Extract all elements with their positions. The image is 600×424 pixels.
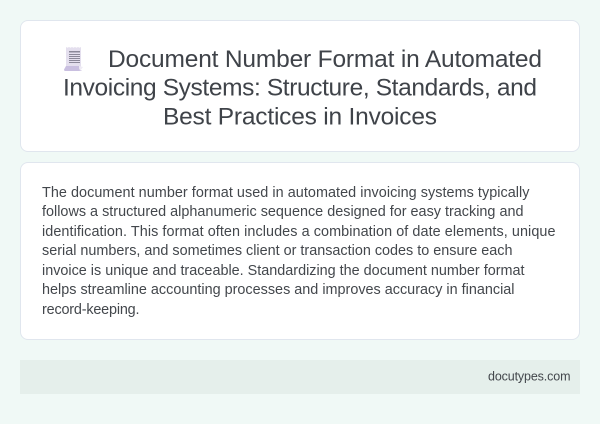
text block: description: serial numbers, and sometimes client or transaction codes to ensure each: [42, 243, 512, 259]
title: Invoicing Systems: Structure, Standards, and: [63, 74, 537, 102]
text block: description: [42, 185, 556, 318]
text block: description: invoice is unique and traceable. Standardizing the document number format: [42, 263, 524, 279]
text block: description: identification. This format often includes a combination of date elements, unique: [42, 224, 556, 240]
footer bar: [20, 360, 580, 394]
text block: description: record-keeping.: [42, 302, 140, 318]
text block: description: follows a structured alphanumeric sequence designed for easy tracking and: [42, 204, 524, 220]
title: [63, 46, 542, 130]
panel: description card: [20, 162, 580, 340]
title: Best Practices in Invoices: [163, 104, 437, 130]
panel: title card: [20, 20, 580, 152]
text block: description: The document number format used in automated invoicing systems typically: [42, 185, 530, 201]
footer text: source: docutypes.com: [488, 370, 570, 384]
title: Document Number Format in Automated: [108, 46, 542, 73]
icon: document receipt: [64, 47, 83, 71]
text block: description: helps streamline accounting processes and improves accuracy in financial: [42, 282, 514, 298]
